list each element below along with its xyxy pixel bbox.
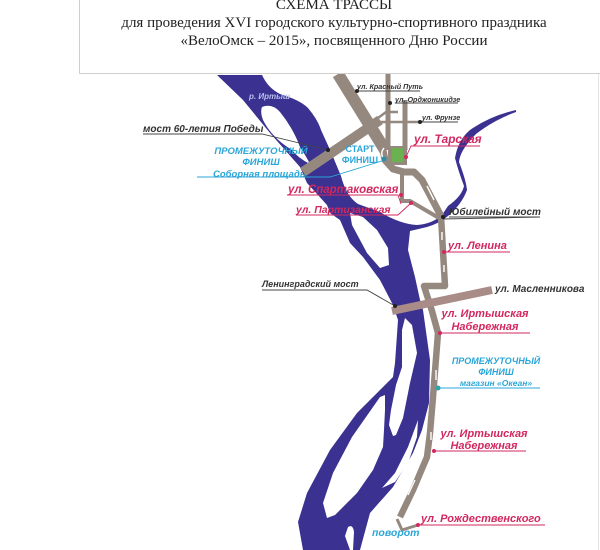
labels: ПРОМЕЖУТОЧНЫЙ (214, 145, 308, 157)
labels: ул. Масленникова (494, 284, 585, 295)
markers (326, 89, 446, 527)
title block: для проведения XVI городского культурно-спортивного праздника (121, 15, 547, 31)
bridge: 60 let Pobedy (303, 120, 380, 172)
labels: магазин «Океан» (460, 378, 532, 388)
labels (143, 82, 585, 539)
labels: ул. Ленина (447, 240, 507, 252)
route: down Lenina street (400, 216, 445, 517)
labels: Соборная площадь (213, 169, 306, 180)
labels: Набережная (450, 440, 518, 452)
page edge (598, 74, 600, 550)
labels: ул. Тарская (413, 132, 482, 146)
side streets (376, 112, 420, 122)
labels: СТАРТ (345, 144, 375, 154)
streets and route (303, 73, 492, 530)
route direction marks (382, 148, 444, 495)
title block (79, 0, 600, 74)
square at start (388, 146, 407, 165)
labels: поворот (372, 527, 420, 539)
bridge: Leningradsky (392, 290, 492, 311)
leaders: cyan (197, 160, 540, 388)
labels: Ленинградский мост (261, 279, 359, 289)
leaders: black (143, 91, 540, 306)
title block: «ВелоОмск – 2015», посвященного Дню России (180, 33, 487, 49)
labels: ул. Иртышская (439, 428, 528, 440)
labels: ПРОМЕЖУТОЧНЫЙ (452, 355, 541, 366)
route: turn (397, 519, 418, 530)
labels: ул. Орджоникидзе (394, 95, 460, 104)
labels: ФИНИШ (342, 155, 378, 165)
label: river name: р. Иртыш (248, 92, 290, 101)
leader lines (143, 91, 545, 525)
labels: Юбилейный мост (449, 206, 541, 218)
labels: ФИНИШ (242, 157, 280, 168)
labels: ФИНИШ (478, 367, 514, 377)
street: Krasny Put diagonal (338, 74, 385, 150)
river Irtysh (217, 75, 516, 550)
labels: ул. Рождественского (420, 513, 541, 525)
labels: ул. Красный Путь (356, 82, 423, 91)
street: verticals (388, 73, 405, 150)
labels: мост 60-летия Победы (143, 123, 264, 135)
labels: ул. Партизанская (295, 204, 391, 216)
labels: ул. Иртышская (440, 308, 529, 320)
labels: ул. Спартаковская (287, 184, 399, 196)
route: centre to Yubileyny bridge (383, 150, 441, 216)
leaders: magenta (287, 146, 545, 525)
labels: ул. Фрунзе (421, 113, 460, 122)
labels: Набережная (451, 321, 519, 333)
islands (261, 106, 418, 550)
